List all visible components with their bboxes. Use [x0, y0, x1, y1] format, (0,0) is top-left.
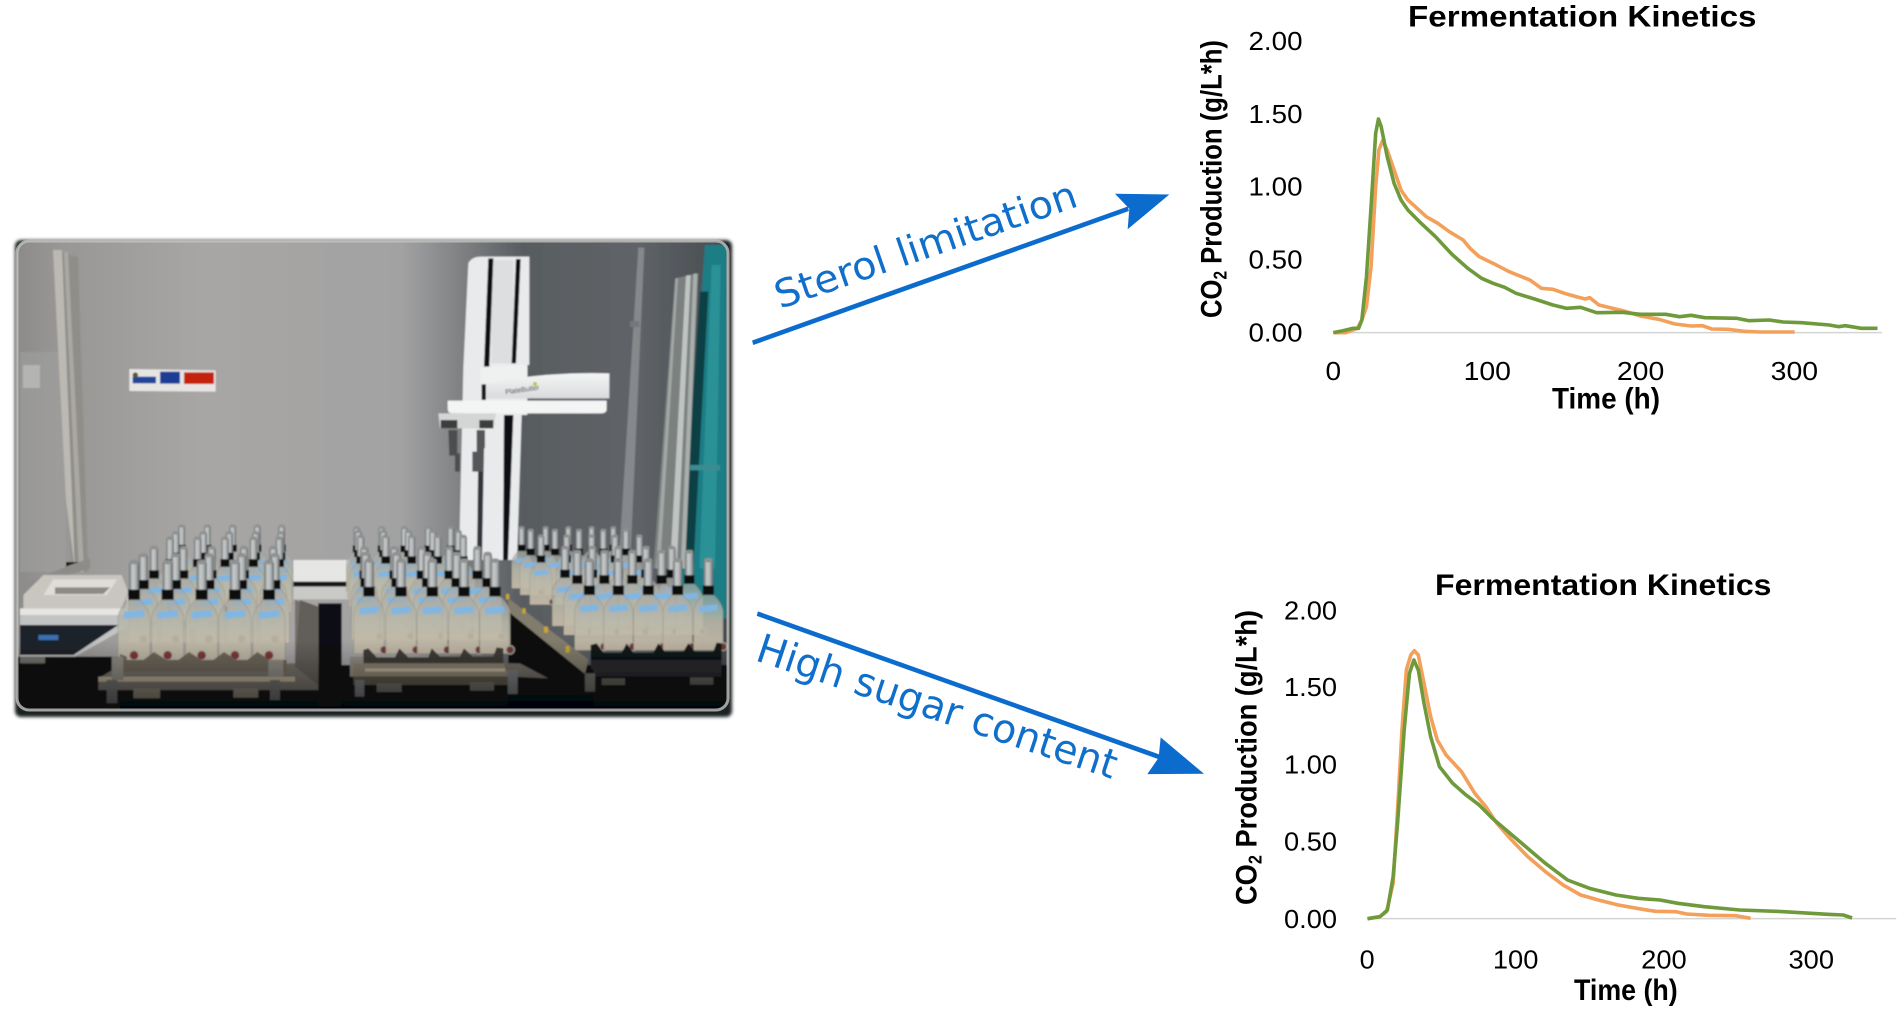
left rail	[53, 250, 88, 572]
arrow: high sugar content	[757, 614, 1204, 774]
y axis ticks: 1.00	[1248, 172, 1302, 202]
y axis ticks: 0.00	[1284, 904, 1337, 934]
x axis ticks: 0	[1326, 356, 1341, 386]
lab bench	[118, 664, 728, 710]
rack 1	[98, 524, 318, 703]
x axis ticks	[1326, 356, 1818, 386]
y axis ticks: 0.50	[1248, 244, 1302, 274]
orange curve	[1333, 141, 1795, 333]
y axis ticks: 1.00	[1284, 750, 1337, 780]
platform behind racks	[293, 560, 350, 582]
x axis ticks: 300	[1771, 356, 1818, 386]
x axis ticks: 100	[1493, 944, 1538, 974]
chart title: Fermentation Kinetics	[1435, 569, 1772, 602]
green curve	[1333, 119, 1878, 333]
x axis title: Time (h)	[1552, 382, 1660, 416]
photo frame	[17, 241, 728, 710]
y axis title: 2	[1210, 271, 1230, 280]
plot lines	[1333, 119, 1882, 333]
logo sticker	[129, 369, 216, 392]
x axis ticks: 0	[1360, 944, 1375, 974]
y axis title: CO	[1230, 860, 1264, 905]
y axis ticks: 2.00	[1284, 596, 1337, 626]
y axis title: 2	[1246, 855, 1266, 864]
x axis ticks: 200	[1641, 944, 1687, 974]
rack 2	[346, 526, 548, 697]
photo: robotic fermentation platform	[10, 238, 732, 720]
chamber wall	[17, 241, 728, 666]
x axis ticks: 300	[1788, 944, 1834, 974]
plot lines	[1367, 651, 1896, 919]
arrow: sterol limitation	[753, 194, 1169, 343]
label: High sugar content: High sugar content	[751, 626, 1123, 788]
y axis ticks: 1.50	[1284, 672, 1337, 702]
chart: fermentation kinetics, high sugar content	[1230, 569, 1896, 1007]
y axis title: Production (g/L*h)	[1230, 610, 1264, 855]
right wall fittings	[618, 245, 727, 618]
y axis title: Production (g/L*h)	[1196, 40, 1228, 271]
orange curve	[1368, 651, 1751, 919]
y axis ticks: 2.00	[1248, 26, 1302, 56]
y axis ticks	[1248, 26, 1302, 348]
x axis ticks	[1360, 944, 1834, 974]
chart: fermentation kinetics, sterol limitation	[1196, 0, 1882, 416]
y axis title: CO	[1196, 273, 1228, 318]
balance	[20, 575, 128, 663]
y axis ticks: 0.00	[1248, 318, 1302, 348]
green curve	[1368, 660, 1852, 919]
y axis ticks	[1284, 596, 1337, 934]
robot arm	[438, 257, 609, 560]
x axis ticks: 100	[1464, 356, 1511, 386]
y axis ticks: 0.50	[1284, 826, 1337, 856]
x axis title: Time (h)	[1574, 974, 1678, 1007]
x axis ticks: 200	[1617, 356, 1664, 386]
y axis ticks: 1.50	[1248, 99, 1302, 129]
rack 3	[506, 526, 727, 707]
robot arm: PlateButler	[505, 385, 540, 396]
chart title: Fermentation Kinetics	[1408, 0, 1756, 34]
label: Sterol limitation: Sterol limitation	[769, 173, 1083, 318]
